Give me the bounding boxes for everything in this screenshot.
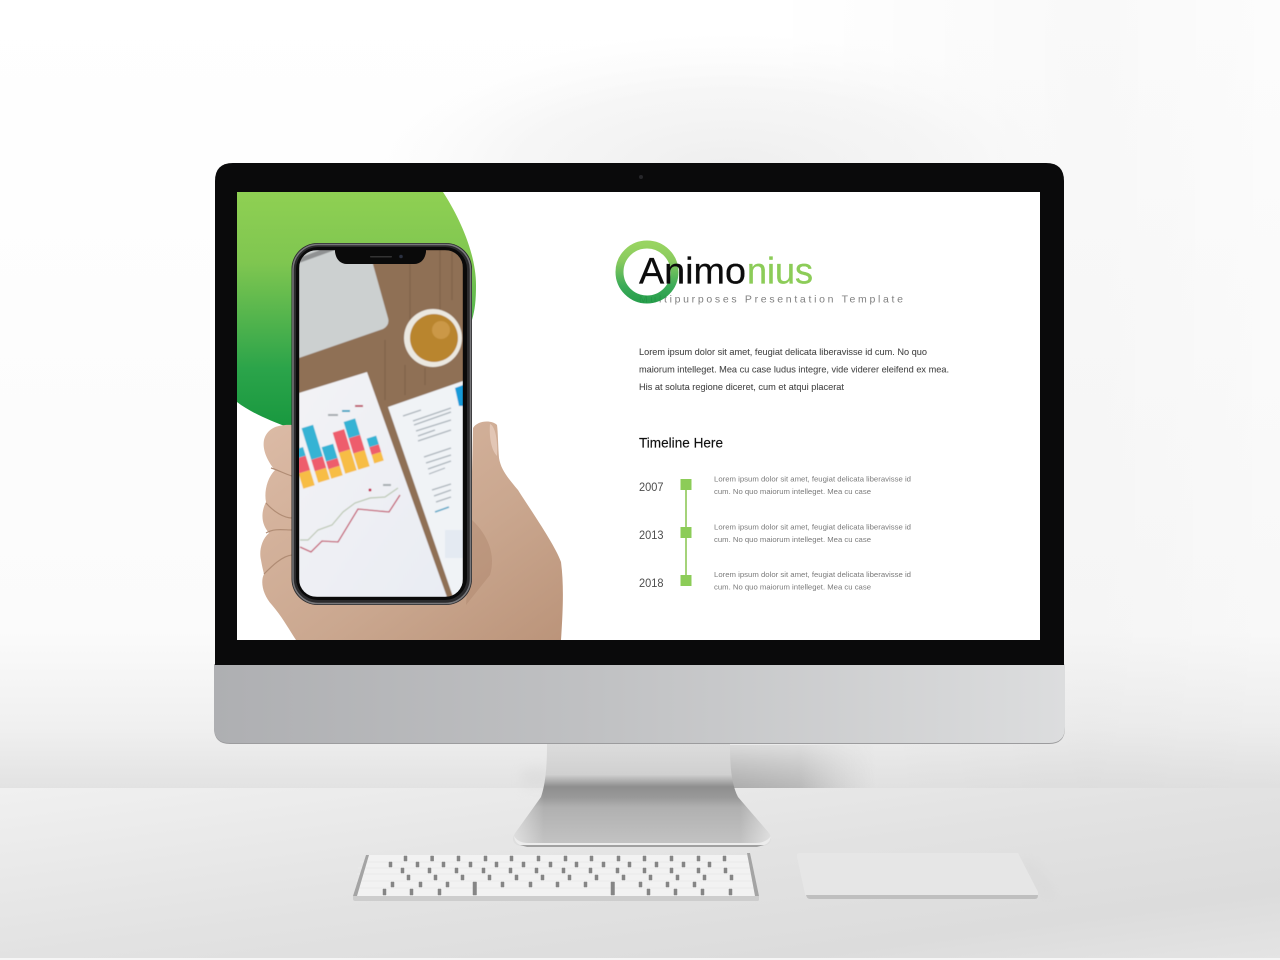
stand shadow on wall — [730, 745, 856, 788]
timeline entry 2013: Lorem ipsum dolor sit amet, feugiat delicata liberavisse id — [714, 522, 911, 532]
title — [639, 250, 813, 292]
timeline entry 2013 — [639, 522, 911, 544]
monitor — [214, 163, 1065, 744]
trackpad — [797, 853, 1055, 899]
phone notch — [335, 250, 426, 264]
intro paragraph: His at soluta regione diceret, cum et atqui placerat — [639, 382, 844, 393]
intro paragraph: Lorem ipsum dolor sit amet, feugiat delicata liberavisse id cum. No quo — [639, 347, 927, 358]
timeline entry 2018: cum. No quo maiorum intelleget. Mea cu case — [714, 582, 871, 592]
timeline — [639, 474, 911, 592]
panel: green gradient blob — [237, 192, 476, 428]
smartphone — [292, 243, 472, 605]
resume paper — [388, 381, 463, 597]
timeline entry 2013: 2013 — [639, 530, 664, 542]
legend — [328, 405, 363, 416]
intro paragraph: maiorum intelleget. Mea cu case ludus integre, vide viderer eleifend ex mea. — [639, 364, 949, 376]
phone body — [292, 243, 472, 605]
paper with charts — [292, 372, 447, 597]
wood table — [299, 250, 463, 597]
stacked bar chart — [292, 418, 384, 489]
timeline entry 2018: Lorem ipsum dolor sit amet, feugiat delicata liberavisse id — [714, 570, 911, 579]
subtitle: Multipurposes Presentation Template — [639, 294, 903, 306]
intro paragraph — [639, 347, 949, 393]
timeline entry 2018 — [639, 570, 911, 592]
phone photo — [292, 250, 463, 597]
timeline heading: Timeline Here — [639, 436, 723, 450]
timeline entry 2018: 2018 — [639, 578, 664, 590]
finger creases — [264, 468, 292, 574]
keyboard — [353, 853, 759, 901]
monitor stand — [513, 744, 771, 847]
trackpad shadow — [1020, 860, 1055, 895]
timeline entry 2013: cum. No quo maiorum intelleget. Mea cu case — [714, 535, 871, 544]
key gaps — [383, 856, 733, 895]
thumb nail — [490, 424, 497, 456]
coffee cup — [404, 309, 462, 367]
timeline entry 2007: 2007 — [639, 482, 664, 494]
timeline entry 2007: cum. No quo maiorum intelleget. Mea cu case — [714, 487, 871, 496]
title: Animo — [639, 250, 746, 292]
timeline connector — [685, 485, 687, 580]
webcam — [639, 175, 643, 179]
logo ring — [620, 244, 674, 300]
monitor chin — [214, 664, 1065, 744]
title: nius — [747, 250, 813, 292]
timeline entry 2007 — [639, 474, 911, 496]
timeline entry 2007: Lorem ipsum dolor sit amet, feugiat delicata liberavisse id — [714, 474, 911, 484]
monitor bezel — [215, 163, 1064, 665]
palm shadow — [466, 520, 492, 605]
desk surface — [0, 788, 1280, 960]
hand holding phone — [260, 422, 563, 640]
line chart — [300, 484, 400, 552]
speaker and camera — [370, 255, 403, 258]
laptop — [299, 250, 388, 358]
slide screen — [237, 192, 1040, 640]
